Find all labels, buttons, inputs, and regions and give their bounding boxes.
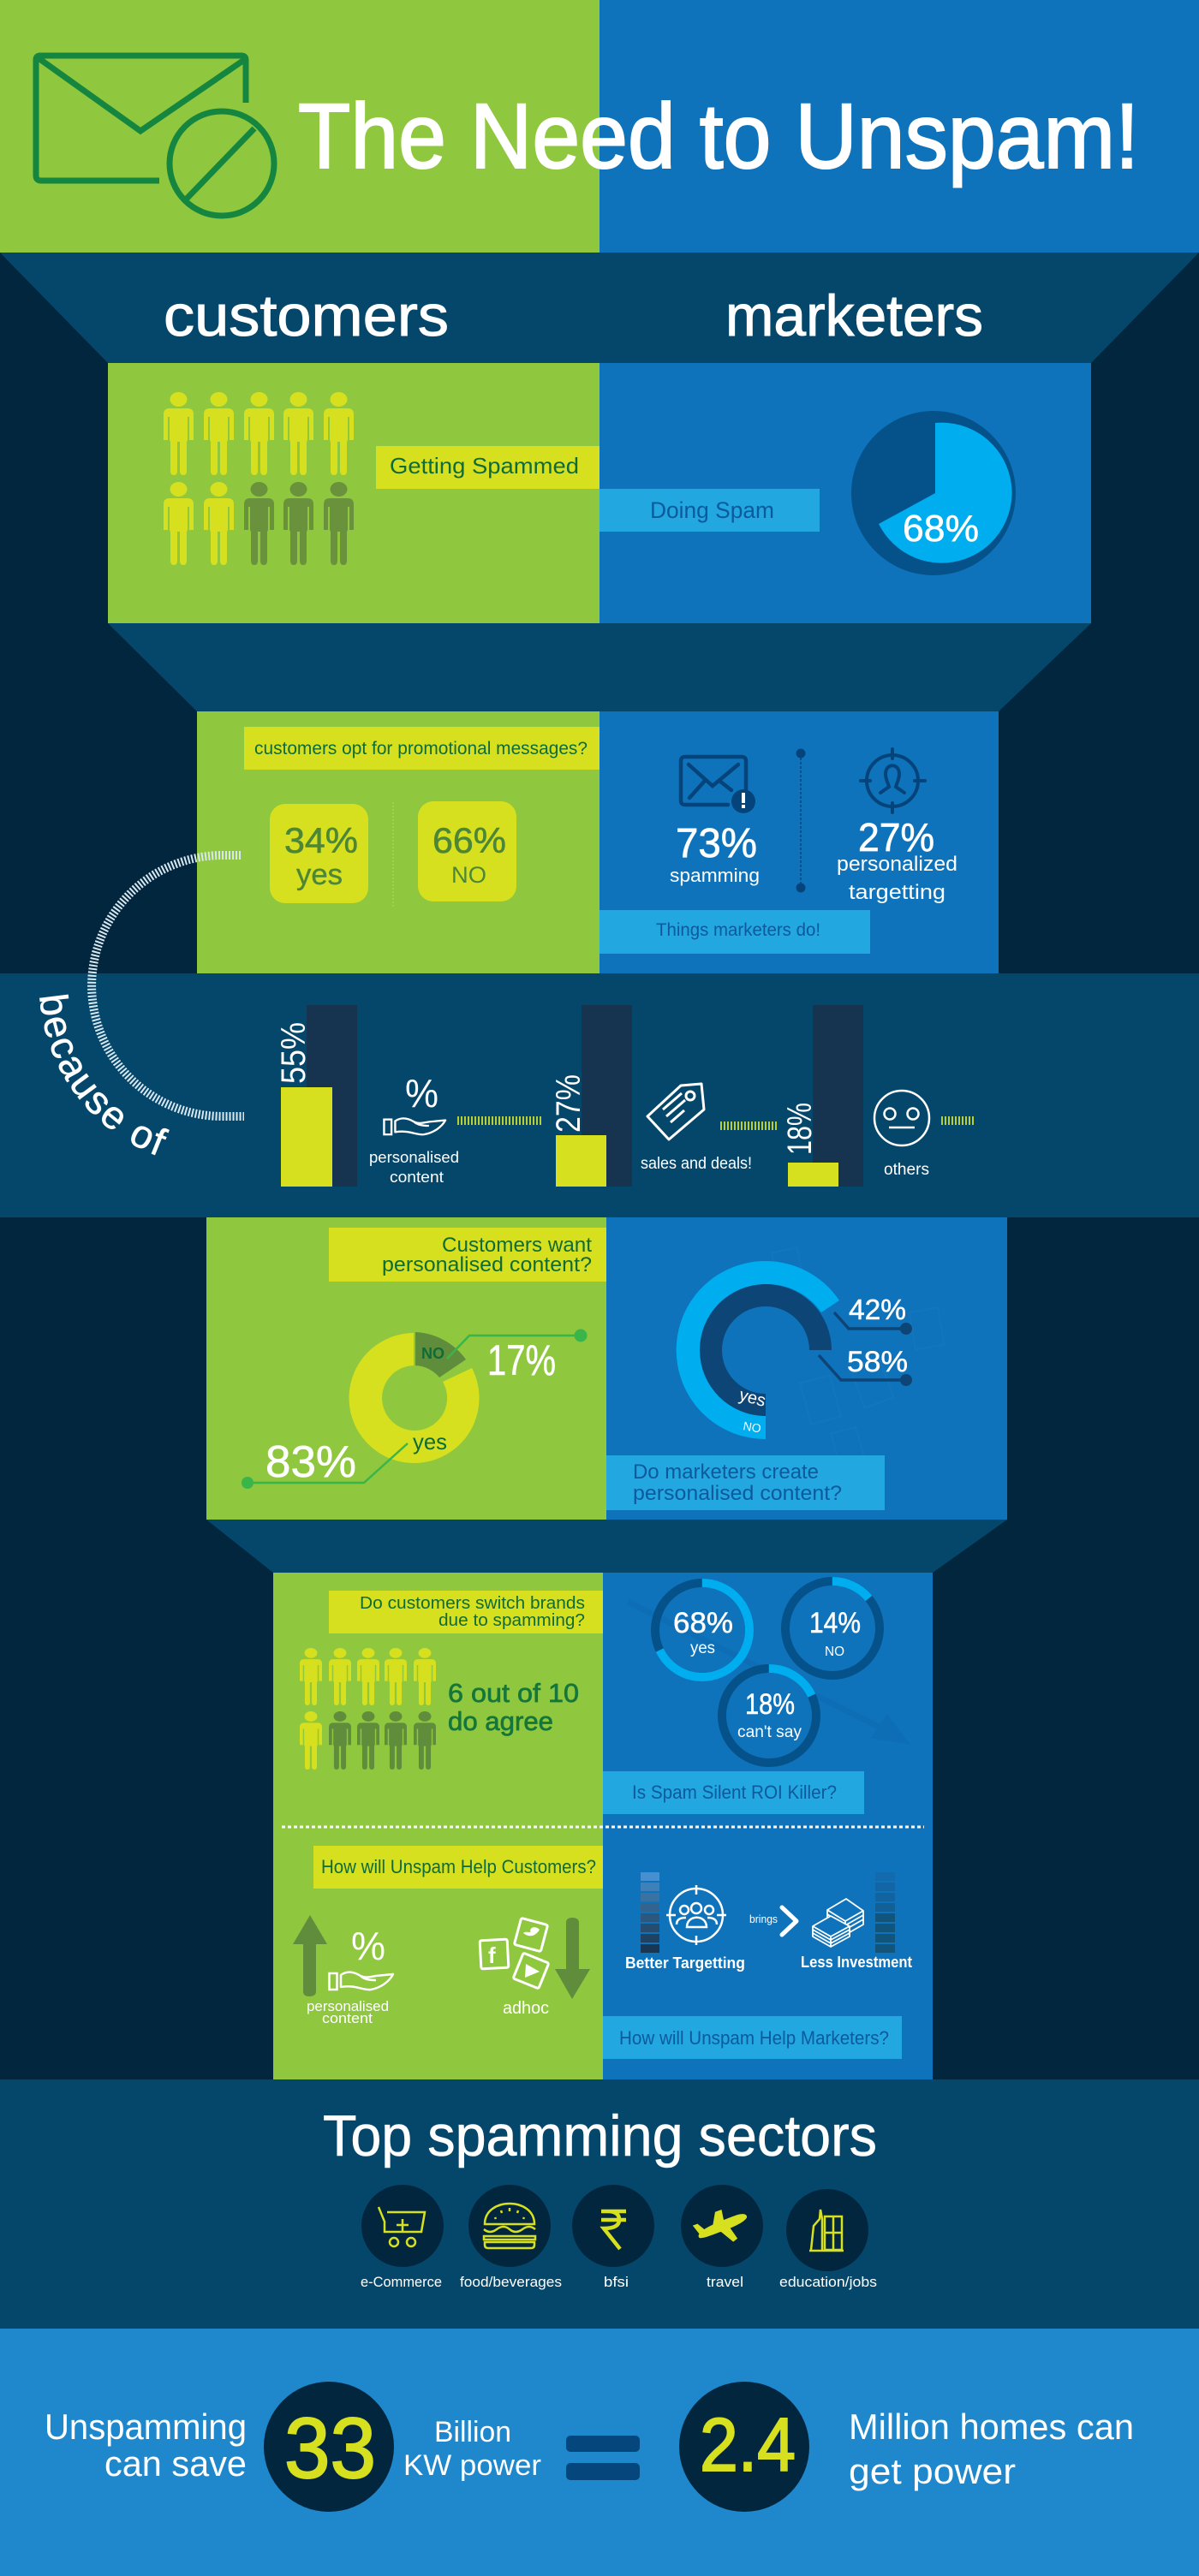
bar: 55% personalised content: 55% [275, 1022, 313, 1084]
donut chart: 83 yes 17 no: NO [421, 1345, 444, 1362]
panel: power savings [0, 2329, 1199, 2576]
leader: 83%: 83% [265, 1437, 356, 1487]
stat: 2.4 [679, 2382, 809, 2512]
arc text: because of: because of [39, 995, 170, 1156]
text: others: others [884, 1161, 929, 1179]
ring: 68% yes [655, 1583, 749, 1677]
title: The Need to Unspam! [298, 84, 1139, 187]
sector: bfsi: bfsi [604, 2274, 629, 2290]
trapezoid connector 4 [206, 1520, 1007, 1573]
leader: 58%: 58% [847, 1346, 908, 1378]
radial chart: marketers personalised content [677, 1261, 839, 1439]
trapezoid connector 2 [108, 623, 1091, 711]
radial chart: marketers personalised content: yes [737, 1386, 767, 1411]
icon: mail alert [681, 757, 755, 813]
people pictogram: 7 of 10 [164, 392, 354, 565]
icon: social media squares: f [488, 1942, 496, 1968]
leader: 83% [242, 1437, 408, 1489]
label: things marketers do [600, 910, 870, 954]
icon: envelope with blocked sign [36, 56, 274, 216]
text: unspamming can save: Unspamming [45, 2406, 247, 2447]
icon: percent hand [384, 1071, 445, 1134]
ring: 14% no: 14% [809, 1607, 861, 1639]
sector: travel: travel [707, 2274, 743, 2290]
text: billion kw power [403, 2416, 541, 2482]
label: how will unspam help marketers [603, 2016, 902, 2059]
connector: brings: brings [749, 1913, 778, 1925]
icon: neutral face [874, 1091, 929, 1145]
ring: 18% cannot say: 18% [745, 1688, 795, 1721]
sector: food and beverages: food/beverages [460, 2274, 562, 2290]
label: promotional messages question [244, 727, 600, 770]
ring: 18% cannot say: can't say [737, 1723, 802, 1741]
bar: 18% others [781, 1005, 863, 1187]
heading: customers: customers [164, 283, 449, 348]
ring: 14% no [785, 1581, 880, 1675]
panel: getting spammed and doing spam [108, 363, 1091, 623]
stat: 73% spamming [670, 821, 760, 886]
icon: target person [861, 749, 925, 812]
ring: 14% no: NO [825, 1645, 844, 1659]
label: do marketers create personalised content: Do marketers create [633, 1461, 819, 1484]
sector: bfsi [572, 2185, 654, 2290]
header panel [0, 0, 1199, 253]
leader: 17% [447, 1329, 588, 1384]
text: billion kw power: Billion [434, 2416, 511, 2448]
stat: 73% spamming: 73% [676, 821, 757, 866]
text: 6 out of 10 do agree: do agree [448, 1706, 553, 1736]
label: customers want personalised content [329, 1228, 606, 1282]
sector: travel [681, 2185, 763, 2290]
radial chart: marketers personalised content: NO [742, 1419, 762, 1436]
icon: price tag [647, 1084, 704, 1139]
leader: 42% [834, 1294, 912, 1335]
label: how will unspam help marketers: How will Unspam Help Marketers? [619, 2027, 889, 2049]
icon: money stacks [813, 1899, 863, 1947]
band: because of [0, 973, 1199, 1217]
sector: food and beverages [460, 2185, 562, 2290]
label: things marketers do: Things marketers do! [656, 920, 820, 940]
icon: percent hand [329, 1924, 393, 1990]
panel: promotional messages and things marketers do [197, 711, 999, 973]
faint downward arrow [628, 1602, 904, 1740]
label: do customers switch brands: Do customers switch brands [360, 1594, 585, 1613]
sector: education and jobs: education/jobs [779, 2274, 877, 2290]
text: adhoc: adhoc [503, 1999, 549, 2018]
label: how will unspam help customers: How will Unspam Help Customers? [321, 1856, 596, 1877]
scale: better targetting [641, 1872, 659, 1953]
stat card: 66% no: NO [451, 862, 486, 888]
text: personalised content: content [322, 2010, 373, 2026]
stat card: 34% yes: yes [296, 859, 343, 891]
divider [796, 748, 805, 892]
text: personalised content: personalised [369, 1149, 459, 1166]
text: less investment: Less Investment [801, 1954, 912, 1971]
text: personalised content: personalised [307, 1998, 389, 2014]
leader: 17%: 17% [487, 1336, 556, 1384]
panel: personalised content [206, 1217, 1007, 1520]
stat: 27% personalized targetting: personalized [837, 853, 957, 876]
leader: 58% [819, 1346, 912, 1386]
label: customers want personalised content: Customers want [442, 1234, 592, 1257]
stat: 33 [264, 2382, 394, 2512]
text: sales and deals: sales and deals! [641, 1155, 752, 1173]
text: personalised content [307, 1998, 389, 2026]
label: doing spam [600, 489, 820, 532]
text: billion kw power: KW power [403, 2449, 541, 2482]
sector: education and jobs [779, 2189, 877, 2290]
text: personalised content: content [390, 1169, 444, 1186]
icon: social media squares [480, 1918, 549, 1989]
sector: e-commerce [361, 2185, 444, 2290]
arrow: down [555, 1918, 590, 1999]
bar chart: reasons [275, 1005, 863, 1187]
bar: 27% sales and deals: 27% [550, 1074, 588, 1133]
leader: 42%: 42% [849, 1294, 906, 1325]
label: do marketers create personalised content: personalised content? [633, 1482, 842, 1505]
stat card: 66% no: 66% [432, 820, 506, 860]
ring: 18% cannot say [722, 1669, 816, 1763]
text: unspamming can save: can save [104, 2443, 247, 2484]
icon: equals [566, 2436, 640, 2480]
panel: top spamming sectors [0, 2079, 1199, 2329]
pie chart: 68% [851, 411, 1016, 575]
stat: 27% personalized targetting: 27% [858, 815, 934, 860]
label: promotional messages question: customers opt for promotional messages? [254, 739, 588, 759]
ring: 68% yes: yes [690, 1639, 715, 1657]
connector: brings [749, 1907, 796, 1935]
heading: marketers: marketers [725, 283, 983, 348]
stat card: 34% yes [270, 804, 368, 903]
icon: percent hand: % [405, 1071, 438, 1115]
icon: audience target [666, 1885, 726, 1945]
stat card: 66% no [418, 801, 516, 901]
people pictogram: 6 of 10 [300, 1648, 436, 1770]
stat card: 34% yes: 34% [284, 820, 358, 860]
trapezoid: column headings band [0, 253, 1199, 363]
label: getting spammed [376, 446, 600, 489]
pie chart: 68%: 68% [903, 508, 979, 550]
label: customers want personalised content: personalised content? [382, 1253, 592, 1276]
bar: 55% personalised content [275, 1005, 357, 1187]
stat: 33: 33 [284, 2400, 376, 2496]
stat: 27% personalized targetting: targetting [849, 881, 945, 904]
ring: 68% yes: 68% [673, 1607, 733, 1639]
stat: 73% spamming: spamming [670, 865, 760, 886]
label: getting spammed: Getting Spammed [390, 453, 579, 479]
label: is spam silent roi killer [603, 1771, 864, 1814]
scale: less investment [875, 1872, 895, 1953]
text: unspamming can save [45, 2406, 247, 2484]
striped arc connector [92, 855, 244, 1116]
text: 6 out of 10 do agree: 6 out of 10 [448, 1678, 579, 1708]
label: do customers switch brands [329, 1591, 603, 1633]
label: how will unspam help customers [313, 1846, 603, 1889]
label: doing spam: Doing Spam [650, 497, 774, 523]
label: do marketers create personalised content [606, 1455, 885, 1510]
text: million homes can get power: Million homes can [849, 2406, 1134, 2447]
text: million homes can get power: get power [849, 2451, 1016, 2491]
text: personalised content [369, 1149, 459, 1186]
donut chart: 83 yes 17 no [349, 1332, 480, 1463]
label: do customers switch brands: due to spamming? [438, 1611, 585, 1630]
bar: 27% sales and deals [550, 1005, 632, 1187]
label: is spam silent roi killer: Is Spam Silent ROI Killer? [632, 1782, 837, 1803]
text: 6 out of 10 do agree [448, 1678, 579, 1736]
arrow: up [293, 1915, 327, 1996]
icon: percent hand: % [351, 1924, 385, 1968]
panel: switching and unspam help [273, 1573, 933, 2079]
sector: e-commerce: e-Commerce [361, 2274, 442, 2290]
bar: 18% others: 18% [781, 1103, 819, 1155]
faint background icons [772, 1247, 945, 1468]
heading: top spamming sectors: Top spamming sectors [323, 2103, 877, 2168]
stat: 27% personalized targetting [837, 815, 957, 904]
donut chart: 83 yes 17 no: yes [413, 1429, 447, 1455]
text: better targetting: Better Targetting [625, 1954, 745, 1972]
text: million homes can get power [849, 2406, 1134, 2491]
stat: 2.4: 2.4 [700, 2402, 796, 2487]
